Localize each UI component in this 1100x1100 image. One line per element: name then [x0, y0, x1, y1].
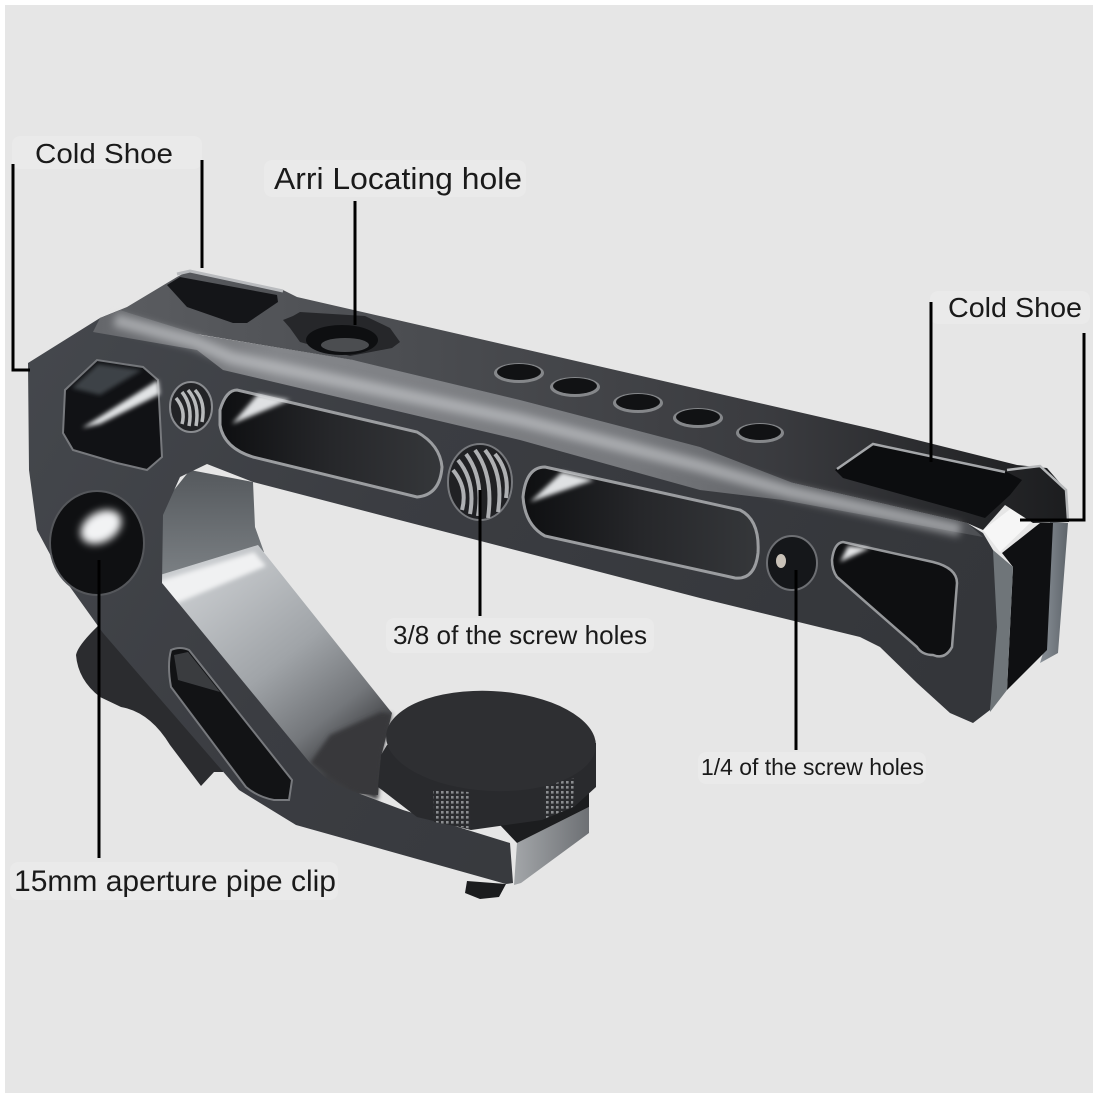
front face and left leg [28, 310, 997, 884]
right end block [983, 507, 1068, 712]
product: camera top handle [28, 270, 1069, 899]
knurled knob [378, 686, 598, 843]
right long slot [523, 467, 758, 578]
callout: Cold Shoe right: Cold Shoe [948, 292, 1082, 323]
callout: 3/8 of the screw holes [386, 490, 654, 653]
center 3/8 screw hole [448, 444, 512, 520]
callout: Cold Shoe left: Cold Shoe [35, 138, 173, 169]
octagonal left hole [63, 360, 162, 470]
left long slot [220, 390, 442, 497]
callout: 15mm aperture pipe clip: 15mm aperture pipe clip [14, 865, 336, 898]
lower left diagonal slot [169, 648, 292, 800]
cold shoe slot left [167, 277, 278, 323]
top surface [100, 270, 1069, 530]
top locating hole [283, 312, 400, 356]
callout: 1/4 of the screw holes [698, 570, 926, 784]
callout: Arri Locating hole [264, 160, 526, 325]
right cold shoe opening [835, 443, 1068, 520]
triangular right slot [832, 542, 957, 656]
clamp foot side [514, 807, 589, 885]
round left hole [50, 491, 144, 595]
small screw hole left [170, 382, 212, 432]
screw under foot [465, 881, 506, 899]
row of five small screw holes [494, 363, 784, 443]
top rear highlight rim [177, 271, 283, 291]
callout: 1/4 of the screw holes: 1/4 of the screw holes [701, 754, 924, 780]
bevel highlight band [93, 310, 983, 537]
callout: 3/8 of the screw holes: 3/8 of the screw holes [393, 620, 647, 650]
callout: Arri Locating hole: Arri Locating hole [274, 161, 522, 196]
rear clamp tab [76, 625, 225, 786]
callout: Cold Shoe right [930, 291, 1090, 520]
inclined inner surface [150, 470, 392, 800]
callout: 15mm aperture pipe clip [10, 560, 338, 900]
callout: Cold Shoe left [12, 136, 202, 370]
1/4 screw hole [767, 536, 817, 590]
